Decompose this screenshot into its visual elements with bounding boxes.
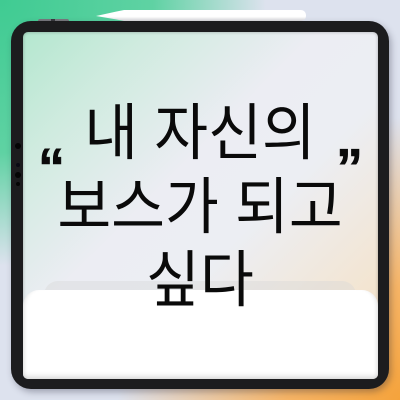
title line 1: 내 자신의 bbox=[84, 99, 316, 167]
camera dots bbox=[15, 143, 21, 186]
title line 2: 보스가 되고 bbox=[57, 173, 343, 241]
title line 3: 싶다 bbox=[146, 246, 254, 314]
tablet volume buttons bbox=[38, 19, 69, 22]
white card bbox=[23, 290, 378, 379]
back card bbox=[44, 281, 356, 341]
closing quote mark: ” bbox=[336, 138, 363, 198]
opening quote mark: “ bbox=[38, 138, 65, 198]
apple pencil bbox=[96, 10, 306, 21]
tablet screen bbox=[23, 32, 378, 379]
title bbox=[57, 99, 343, 314]
